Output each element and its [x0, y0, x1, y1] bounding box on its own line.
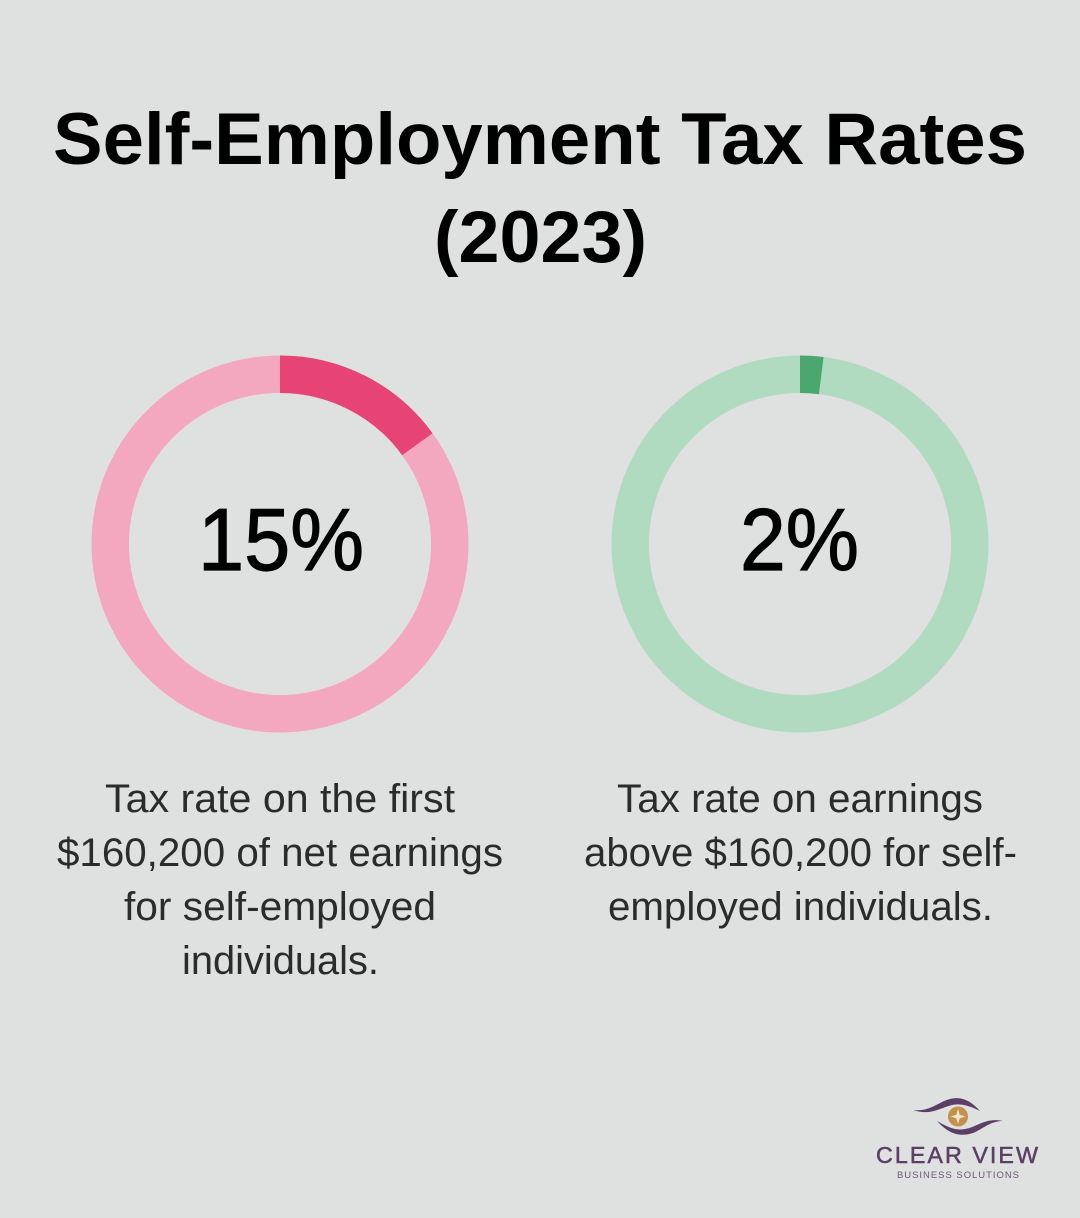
icon: eye with star — [913, 1098, 1003, 1135]
description: 15% rate: for self-employed — [124, 885, 436, 929]
description: 2% rate: above $160,200 for self- — [584, 831, 1017, 875]
panel: 2% rate — [584, 374, 1017, 929]
description: 15% rate: Tax rate on the first — [105, 777, 455, 821]
logo: Clear View Business Solutions — [876, 1098, 1040, 1181]
description: 15% rate — [57, 777, 503, 983]
logo tagline: BUSINESS SOLUTIONS — [897, 1170, 1020, 1181]
description: 2% rate: employed individuals. — [608, 885, 993, 929]
title: Self-Employment Tax Rates — [53, 99, 1027, 180]
description: 15% rate: individuals. — [182, 939, 379, 983]
description: 2% rate — [584, 777, 1017, 929]
title: (2023) — [434, 197, 647, 278]
donut chart: 15% — [110, 374, 450, 714]
value: 2%: 2% — [740, 490, 859, 589]
description: 15% rate: $160,200 of net earnings — [57, 831, 503, 875]
logo wordmark: CLEAR VIEW — [876, 1142, 1040, 1168]
title — [53, 99, 1027, 278]
panel: 15% rate — [57, 374, 503, 983]
value: 15%: 15% — [198, 490, 364, 589]
description: 2% rate: Tax rate on earnings — [617, 777, 983, 821]
donut chart: 2% — [630, 374, 970, 714]
